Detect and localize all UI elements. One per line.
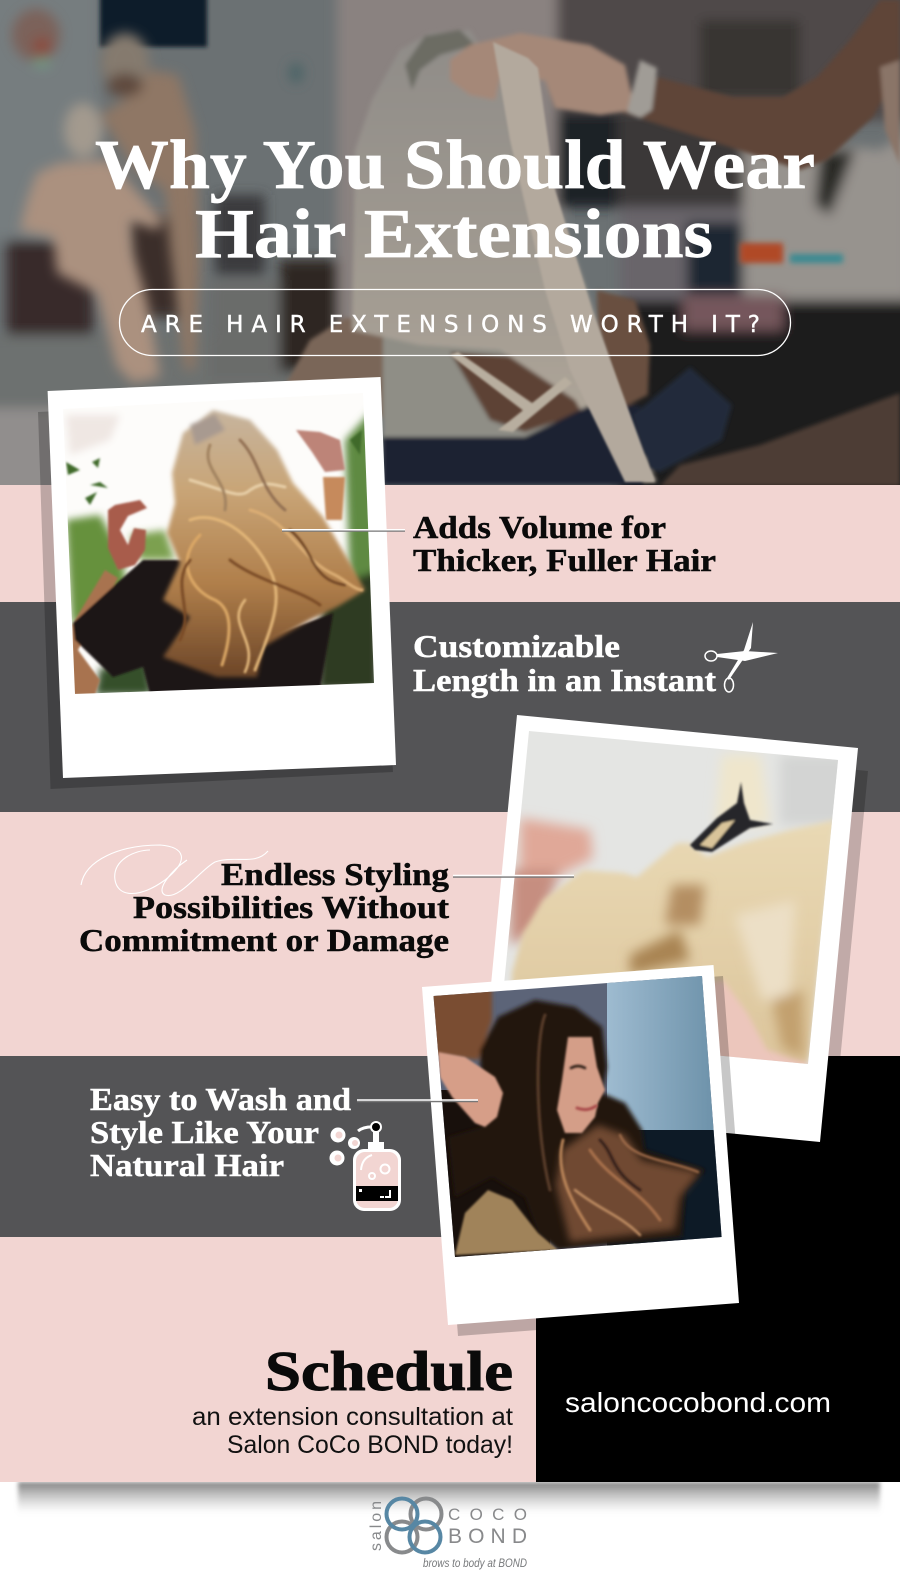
soft shadow under panels — [18, 1482, 880, 1514]
benefit 4 text: Style Like Your — [90, 1114, 319, 1150]
face and hair detail — [538, 1015, 698, 1235]
logo: salon coco bond: BOND — [448, 1525, 527, 1548]
call to action heading: Schedule — [265, 1341, 513, 1403]
call to action text: Salon CoCo BOND today! — [227, 1431, 513, 1459]
benefit 1 text: Adds Volume for — [413, 509, 666, 545]
polaroid 2: blonde hair with clip — [479, 715, 868, 1165]
benefit 1 text — [413, 509, 716, 578]
main title: Why You Should Wear — [95, 127, 815, 204]
logo: salon coco bond: COCO — [448, 1505, 527, 1524]
benefit 1 text: Thicker, Fuller Hair — [413, 542, 716, 578]
polaroid 3: brunette woman in salon — [422, 965, 749, 1336]
subtitle pill — [120, 290, 790, 356]
benefit 3 text: Endless Styling — [221, 856, 449, 892]
benefit 4 text — [90, 1081, 351, 1183]
photo: smiling woman with long brown hair — [430, 970, 730, 1265]
benefit 3 text: Commitment or Damage — [79, 922, 449, 958]
hero photo: salon stylist fitting extensions — [0, 0, 900, 500]
decorative swirl — [81, 845, 268, 896]
call to action text — [192, 1403, 513, 1459]
call to action text: an extension consultation at — [192, 1403, 513, 1431]
benefit 4 text: Easy to Wash and — [90, 1081, 351, 1117]
subtitle pill: ARE HAIR EXTENSIONS WORTH IT? — [141, 312, 760, 338]
pink panel: schedule background — [0, 1237, 536, 1482]
benefit 3 text — [79, 856, 449, 958]
benefit 3 text: Possibilities Without — [133, 889, 449, 925]
photo: woman with wavy hair from behind — [64, 407, 374, 694]
main title — [95, 127, 815, 273]
main title: Hair Extensions — [195, 196, 713, 273]
gray band 4 — [0, 1056, 536, 1237]
icon: scissors — [705, 622, 778, 692]
pink band 1 — [0, 485, 900, 602]
icon: soap bottle with bubbles — [330, 1122, 401, 1211]
benefit 2 text: Length in an Instant — [413, 662, 716, 698]
pink band 3 — [0, 812, 900, 1056]
connector line 3 — [357, 1100, 478, 1102]
hair strands — [180, 440, 362, 672]
gray band 2 — [0, 602, 900, 812]
benefit 2 text — [413, 628, 716, 698]
logo: salon coco bond: brows to body at BOND — [423, 1556, 527, 1570]
benefit 2 text: Customizable — [413, 628, 620, 664]
connector line 1 — [282, 530, 405, 531]
photo: blonde hair sections and clip — [495, 725, 850, 1070]
logo: salon coco bond: salon — [368, 1501, 385, 1551]
connector line 2 — [453, 876, 574, 877]
polaroid 1: wavy blonde hair — [38, 377, 396, 789]
website: saloncocobond.com — [565, 1387, 831, 1418]
black panel: website background — [536, 1056, 900, 1482]
benefit 4 text: Natural Hair — [90, 1147, 284, 1183]
logo: salon coco bond — [368, 1498, 527, 1570]
